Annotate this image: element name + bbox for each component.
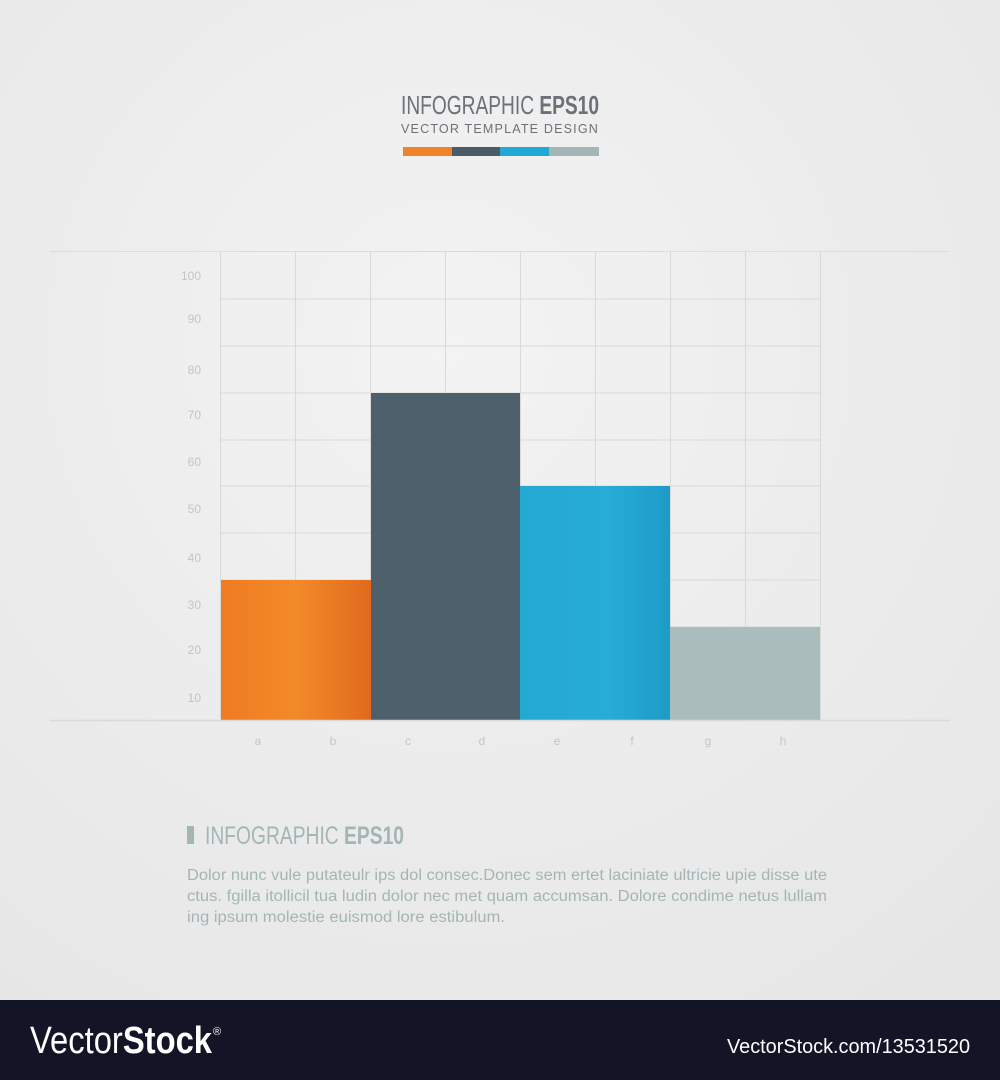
- text heading: INFOGRAPHIC EPS10: [205, 822, 404, 850]
- y axis labels: 20: [188, 643, 201, 657]
- x axis labels: h: [780, 734, 786, 748]
- bar chart: [50, 252, 950, 748]
- y axis labels: 10: [188, 691, 201, 705]
- paragraph: ctus. fgilla itollicil tua ludin dolor nec met quam accumsan. Dolore condime netus lullam: [187, 888, 827, 905]
- footer: VectorStock: [30, 1020, 213, 1062]
- paragraph: Dolor nunc vule putateulr ips dol consec.Donec sem ertet laciniate ultricie upie disse ute: [187, 867, 827, 884]
- y axis labels: 90: [188, 312, 201, 326]
- bar g-h gray: [670, 627, 820, 720]
- footer: VectorStock.com/13531520: [727, 1036, 970, 1058]
- footer: ®: [213, 1026, 221, 1038]
- x axis labels: f: [630, 734, 634, 748]
- y axis labels: 60: [188, 455, 201, 469]
- y axis labels: 70: [188, 408, 201, 422]
- subtitle: VECTOR TEMPLATE DESIGN: [401, 121, 599, 136]
- paragraph: ing ipsum molestie euismod lore estibulum.: [187, 909, 505, 926]
- title: INFOGRAPHIC EPS10: [401, 90, 599, 120]
- bar a-b orange: [221, 580, 371, 720]
- bar e-f blue: [520, 486, 670, 720]
- x axis labels: b: [330, 734, 337, 748]
- x axis labels: [255, 734, 786, 748]
- paragraph: [187, 867, 827, 926]
- y axis labels: 80: [188, 363, 201, 377]
- x axis labels: e: [554, 734, 561, 748]
- y axis labels: 50: [188, 502, 201, 516]
- x axis labels: c: [405, 734, 411, 748]
- x axis labels: a: [255, 734, 262, 748]
- x axis labels: g: [705, 734, 711, 748]
- y axis labels: 40: [188, 551, 201, 565]
- y axis labels: [181, 269, 201, 705]
- x axis labels: d: [479, 734, 485, 748]
- footer: [0, 1000, 1000, 1080]
- y axis labels: 30: [188, 598, 201, 612]
- title: [401, 90, 599, 136]
- color legend bar: [403, 147, 599, 156]
- bar c-d dark: [371, 393, 520, 720]
- y axis labels: 100: [181, 269, 201, 283]
